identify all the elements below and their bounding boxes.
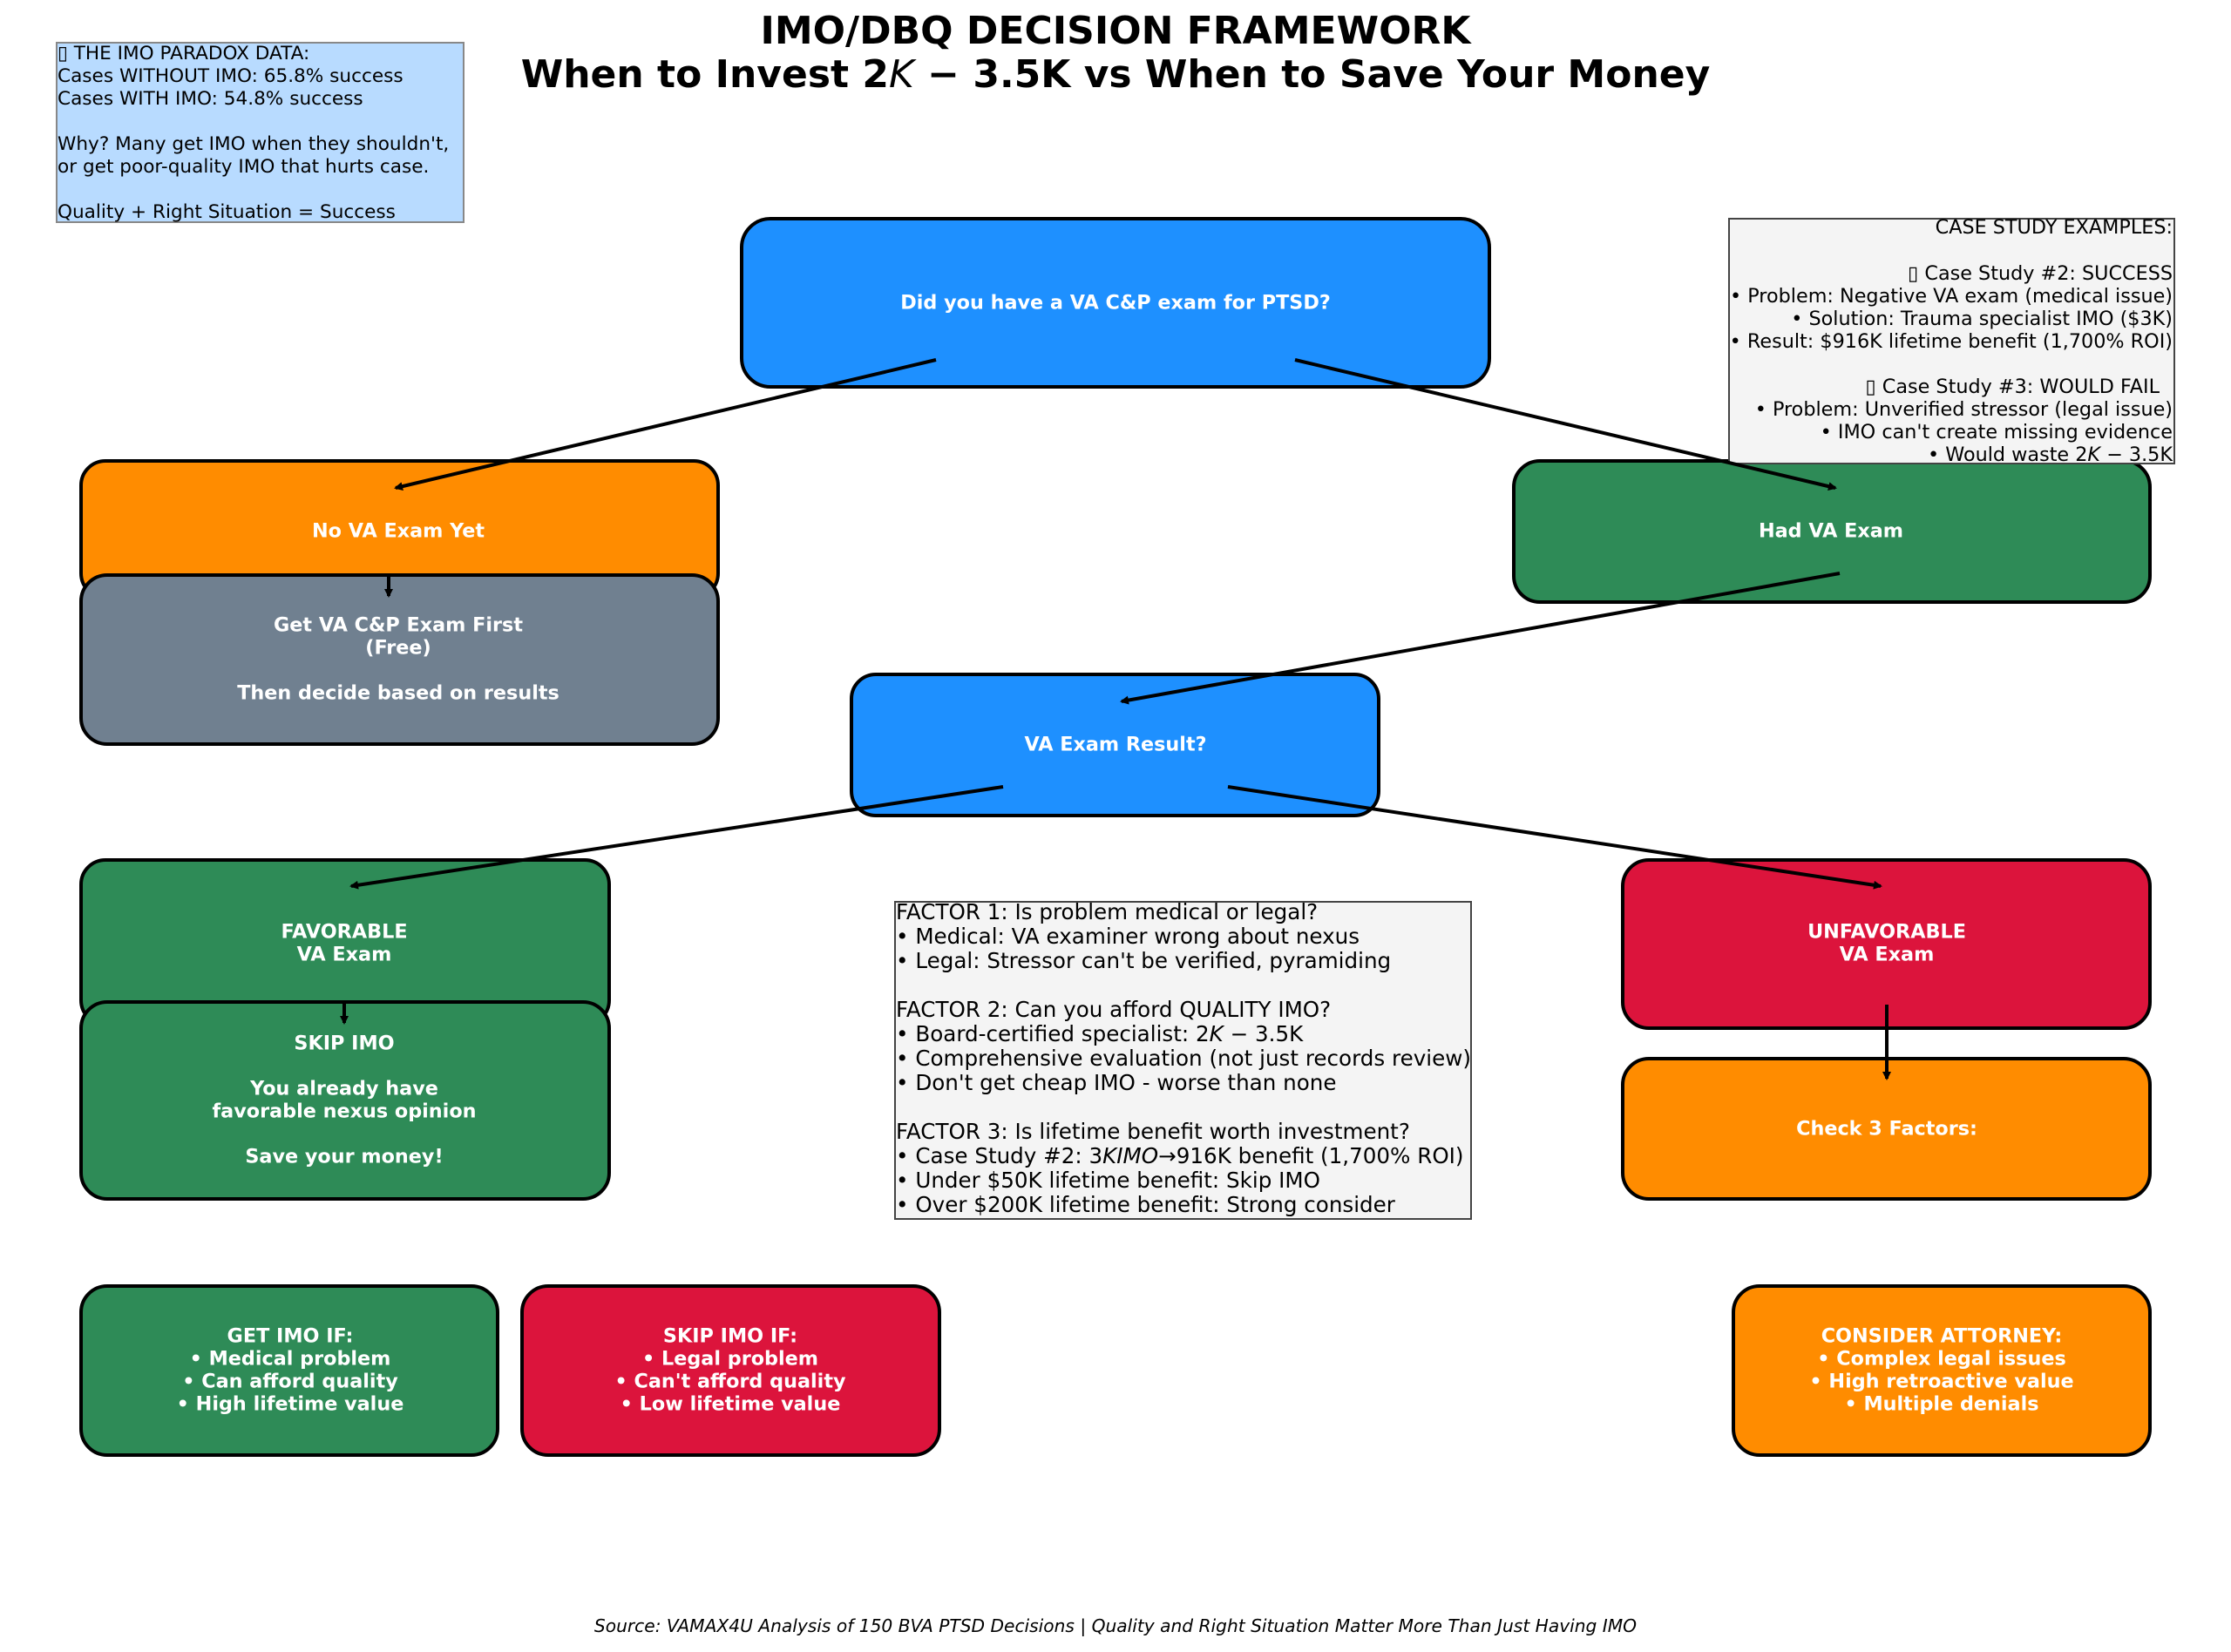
box: favorable	[81, 860, 609, 1025]
box: unfavorable	[1623, 860, 2150, 1028]
box: skip IMO if: • Legal problem	[642, 1347, 818, 1370]
panel: three factors: FACTOR 1: Is problem medical or legal?	[896, 899, 1318, 924]
title: IMO/DBQ DECISION FRAMEWORK	[760, 9, 1472, 53]
panel: three factors: • Medical: VA examiner wrong about nexus	[896, 924, 1360, 949]
box: consider attorney: • Multiple denials	[1844, 1392, 2039, 1415]
box: get VA exam first: (Free)	[365, 636, 431, 659]
box: skip IMO if	[522, 1286, 939, 1455]
title: When to Invest 2K − 3.5K vs When to Save Your Money	[521, 52, 1710, 97]
panel: case study examples: • Problem: Unverified stressor (legal issue)	[1755, 398, 2173, 421]
panel: three factors: • Over $200K lifetime benefit: Strong consider	[896, 1192, 1396, 1217]
box: skip IMO: Save your money!	[245, 1145, 444, 1168]
panel: case study examples: • Problem: Negative VA exam (medical issue)	[1730, 285, 2173, 308]
box: check 3 factors	[1623, 1059, 2150, 1199]
source footer: Source: VAMAX4U Analysis of 150 BVA PTSD Decisions | Quality and Right Situation Matter More Than Just Having IMO	[594, 1615, 1637, 1636]
panel: three factors	[895, 899, 1471, 1219]
box: get VA exam first: Get VA C&P Exam First	[274, 613, 523, 636]
box: skip IMO if: • Can't afford quality	[614, 1370, 846, 1392]
box: consider attorney	[1733, 1286, 2150, 1455]
box: get IMO if: • Medical problem	[190, 1347, 390, 1370]
panel: three factors: • Case Study #2: 3KIMO→916K benefit (1,700% ROI)	[896, 1143, 1464, 1168]
box: skip IMO: favorable nexus opinion	[212, 1100, 477, 1122]
box: skip IMO: SKIP IMO	[294, 1032, 395, 1054]
panel: IMO paradox data: Cases WITH IMO: 54.8% success	[58, 88, 363, 110]
arrows	[344, 360, 1887, 1079]
panel: IMO paradox data	[57, 43, 464, 223]
box: consider attorney: • Complex legal issues	[1817, 1347, 2066, 1370]
box: did you have VA exam: Did you have a VA C&P exam for PTSD?	[900, 291, 1331, 314]
box: get IMO if: • Can afford quality	[182, 1370, 398, 1392]
box: favorable: VA Exam	[297, 943, 391, 965]
panel: IMO paradox data: Quality + Right Situation = Success	[58, 201, 396, 223]
box: get IMO if	[81, 1286, 498, 1455]
panel: case study examples: • Solution: Trauma specialist IMO ($3K)	[1791, 308, 2173, 330]
panel: case study examples: • IMO can't create missing evidence	[1821, 421, 2173, 443]
panel: case study examples: CASE STUDY EXAMPLES:	[1936, 216, 2173, 239]
panel: three factors: FACTOR 3: Is lifetime benefit worth investment?	[896, 1119, 1410, 1144]
panel: three factors: • Legal: Stressor can't be verified, pyramiding	[896, 948, 1391, 973]
panel: three factors: FACTOR 2: Can you afford QUALITY IMO?	[896, 997, 1331, 1022]
box: skip IMO: You already have	[249, 1077, 438, 1100]
panel: case study examples: • Would waste 2K − 3.5K	[1928, 443, 2173, 466]
panel: case study examples: ▯ Case Study #3: WOULD FAIL	[1865, 376, 2160, 398]
box: skip IMO if: • Low lifetime value	[620, 1392, 840, 1415]
panel: three factors: • Under $50K lifetime benefit: Skip IMO	[896, 1168, 1320, 1193]
box: had VA exam	[1514, 461, 2150, 602]
panel: case study examples: • Result: $916K lifetime benefit (1,700% ROI)	[1730, 330, 2173, 353]
box: VA exam result	[851, 674, 1379, 816]
box: consider attorney: • High retroactive value	[1809, 1370, 2074, 1392]
panel: three factors: • Board-certified specialist: 2K − 3.5K	[896, 1021, 1304, 1046]
panel: IMO paradox data: or get poor-quality IMO that hurts case.	[58, 156, 429, 178]
box: skip IMO	[81, 1002, 609, 1199]
panel: IMO paradox data: Why? Many get IMO when they shouldn't,	[58, 133, 449, 155]
panel: case study examples	[1729, 216, 2174, 466]
box: consider attorney: CONSIDER ATTORNEY:	[1821, 1324, 2062, 1347]
box: had VA exam: Had VA Exam	[1759, 519, 1903, 542]
box: get VA exam first	[81, 575, 718, 744]
box: did you have VA exam	[742, 219, 1489, 387]
box: unfavorable: UNFAVORABLE	[1807, 920, 1966, 943]
panel: three factors: • Don't get cheap IMO - worse than none	[896, 1070, 1337, 1095]
box: get IMO if: • High lifetime value	[177, 1392, 403, 1415]
box: no VA exam yet	[81, 461, 718, 598]
box: VA exam result: VA Exam Result?	[1024, 734, 1207, 756]
box: unfavorable: VA Exam	[1840, 943, 1934, 965]
panel: three factors: • Comprehensive evaluation (not just records review)	[896, 1046, 1471, 1071]
box: skip IMO if: SKIP IMO IF:	[663, 1324, 797, 1347]
box: get IMO if: GET IMO IF:	[227, 1324, 353, 1347]
box: no VA exam yet: No VA Exam Yet	[312, 519, 485, 542]
panel: case study examples: ▯ Case Study #2: SUCCESS	[1908, 262, 2173, 285]
box: check 3 factors: Check 3 Factors:	[1796, 1117, 1977, 1140]
panel: IMO paradox data: Cases WITHOUT IMO: 65.8% success	[58, 65, 403, 87]
box: favorable: FAVORABLE	[281, 920, 408, 943]
title	[521, 9, 1710, 97]
box: get VA exam first: Then decide based on results	[237, 681, 559, 704]
panel: IMO paradox data: ▯ THE IMO PARADOX DATA:	[58, 43, 309, 64]
